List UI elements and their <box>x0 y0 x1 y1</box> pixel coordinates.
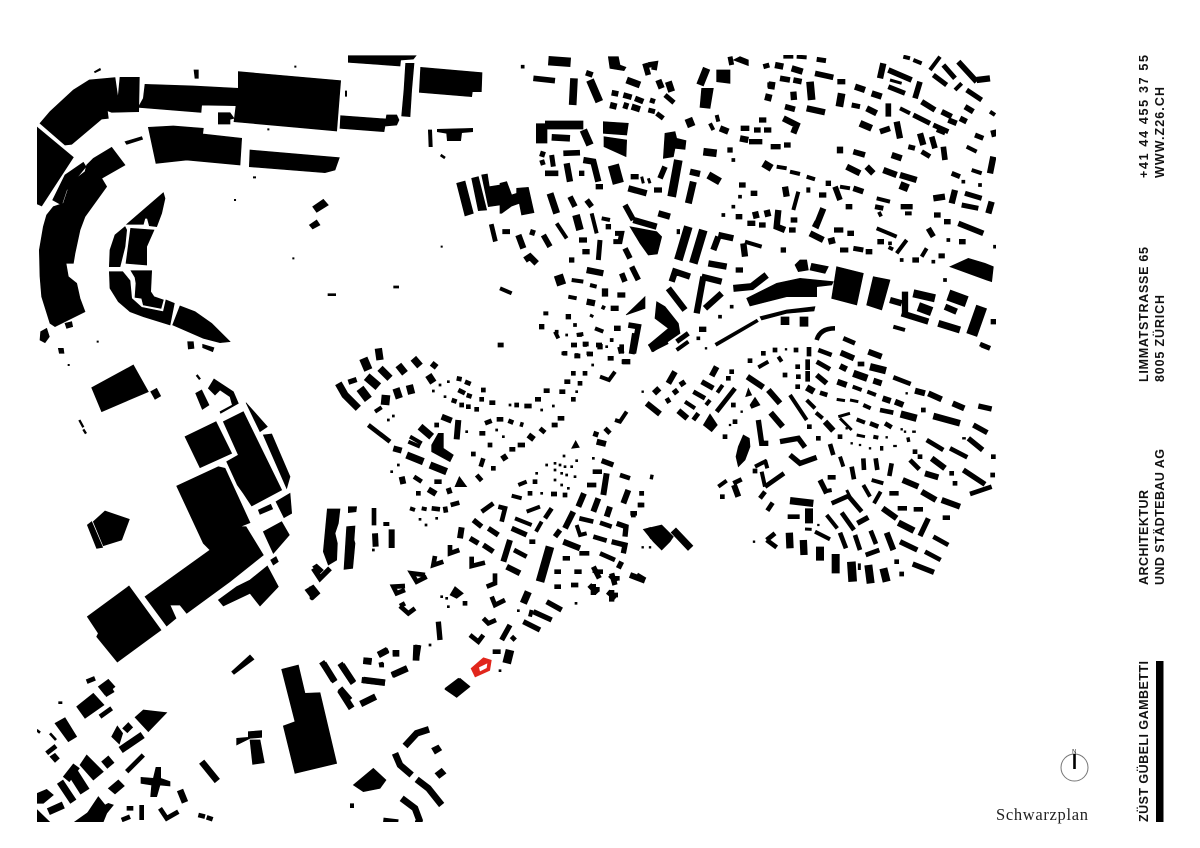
title block: website: WWW.Z26.CH <box>1153 87 1167 178</box>
district: central valley settlements <box>310 332 650 700</box>
title block: firm name: ZÜST GÜBELI GAMBETTI <box>1136 661 1151 822</box>
district: northern quarter of perimeter blocks <box>500 57 995 362</box>
district: eastern hillside terraces <box>630 340 993 583</box>
title block: street address: LIMMATSTRASSE 65 <box>1137 247 1151 382</box>
plan caption: Schwarzplan <box>996 805 1088 824</box>
district: southwest blocks and tall slab <box>37 645 469 822</box>
title block: discipline line one: ARCHITEKTUR <box>1137 490 1151 585</box>
title block: contact line: +41 44 455 37 55 <box>1137 55 1151 178</box>
title block: city: 8005 ZÜRICH <box>1152 295 1167 382</box>
icon: north arrow <box>1061 750 1088 781</box>
black vertical bar <box>1156 661 1164 822</box>
black plan: city map <box>37 56 995 822</box>
icon: north arrow: N <box>1072 750 1076 756</box>
district: west hospital and campus blocks <box>79 365 323 662</box>
title block: discipline line two: UND STÄDTEBAU AG <box>1152 449 1167 585</box>
district: northwest industrial and curved blocks <box>37 56 500 365</box>
project site marked in red <box>471 657 492 677</box>
